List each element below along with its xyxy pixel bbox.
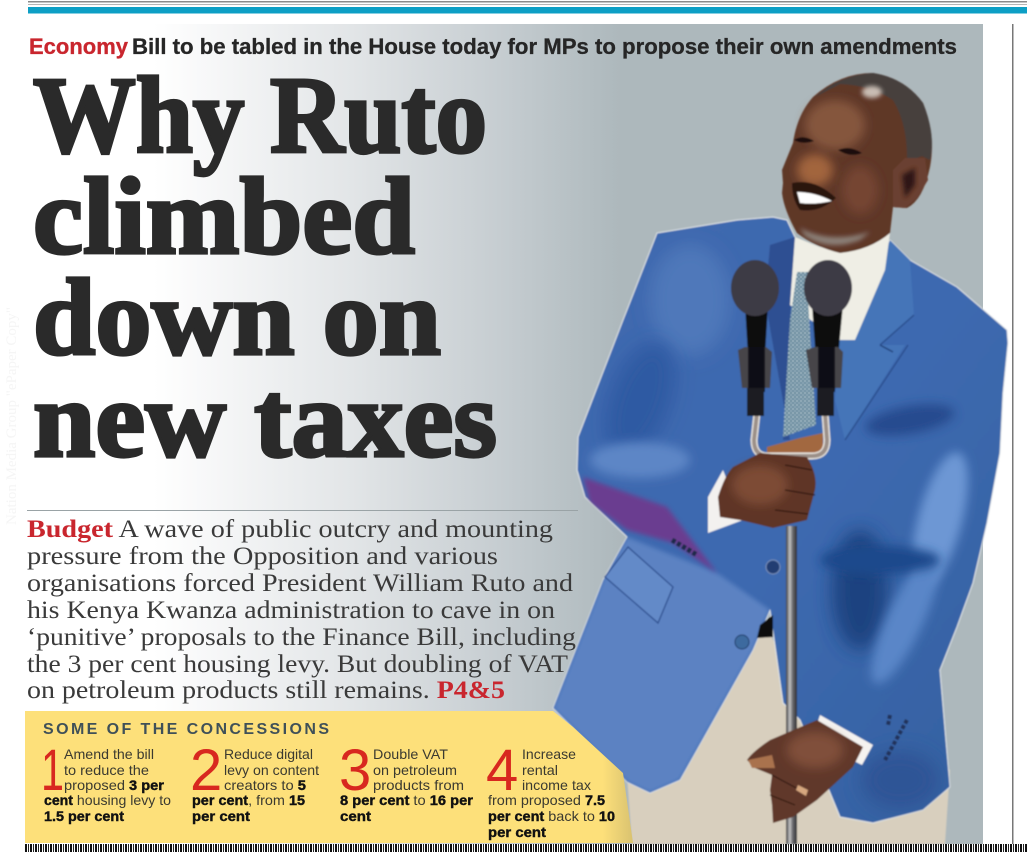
concession 1: Amend the bill — [64, 746, 154, 762]
subhead: Bill to be tabled in the House today for MPs to propose their own amendments — [132, 34, 957, 59]
concession 3 — [339, 738, 474, 824]
lower hand — [747, 720, 863, 823]
microphone right — [804, 260, 852, 416]
concession 2: Reduce digital — [224, 746, 313, 762]
summary paragraph — [27, 516, 577, 704]
microphone left — [731, 260, 779, 416]
right column rule — [1012, 24, 1014, 844]
concession 4: per cent back to 10 — [488, 808, 615, 824]
top rules — [28, 1, 1027, 14]
concession 4: per cent — [488, 824, 546, 840]
concession 1: to reduce the — [64, 762, 149, 778]
microphone stand — [786, 526, 797, 844]
mouth — [792, 182, 836, 210]
head — [782, 73, 932, 253]
shirt collar — [790, 233, 890, 340]
summary paragraph: on petroleum products still remains. P4&5 — [27, 677, 505, 704]
headline: Why Ruto — [33, 55, 487, 176]
concession 2: levy on content — [224, 762, 319, 778]
concession 4: income tax — [522, 777, 591, 793]
concession 3: Double VAT — [373, 746, 448, 762]
headline: new taxes — [33, 359, 497, 480]
eyes — [794, 137, 814, 143]
concession 2: creators to 5 — [224, 777, 306, 793]
concession 3: products from — [373, 777, 464, 793]
concession 2: per cent — [192, 808, 250, 824]
tie — [783, 272, 816, 437]
upper cuff — [708, 470, 743, 533]
upper hand — [718, 453, 816, 528]
suit body — [553, 217, 1008, 823]
headline: down on — [33, 257, 441, 378]
concession 4 — [486, 738, 615, 840]
subhead: Economy — [29, 34, 129, 59]
summary paragraph: the 3 per cent housing levy. But doubling of VAT — [27, 651, 568, 678]
trousers — [627, 625, 950, 844]
concessions heading: SOME OF THE CONCESSIONS — [43, 721, 329, 738]
summary paragraph: pressure from the Opposition and various — [27, 543, 498, 570]
concession 3: 3 — [339, 738, 371, 803]
concession 1: cent housing levy to — [44, 792, 171, 808]
summary rule — [27, 510, 578, 511]
ear — [893, 158, 928, 208]
photo: man in blue suit at microphones — [553, 73, 1008, 844]
concession 3: on petroleum — [373, 762, 457, 778]
concession 3: 8 per cent to 16 per — [340, 792, 474, 808]
concession 1: 1.5 per cent — [44, 808, 124, 824]
summary paragraph: Budget A wave of public outcry and mounting — [27, 516, 554, 543]
concession 1: proposed 3 per — [64, 777, 165, 793]
concession 2 — [190, 738, 319, 824]
concession 2: 2 — [190, 738, 222, 803]
lower cuff — [812, 715, 873, 765]
right sleeve buttons — [885, 715, 907, 760]
belt — [757, 615, 773, 638]
barcode rule — [25, 844, 1027, 852]
concession 4: from proposed 7.5 — [488, 792, 605, 808]
summary paragraph: organisations forced President William Ruto and — [27, 570, 574, 597]
concession 4: rental — [522, 762, 558, 778]
concession 4: 4 — [486, 738, 518, 803]
suit shading — [553, 237, 979, 810]
summary paragraph: ‘punitive’ proposals to the Finance Bill, including — [27, 624, 577, 651]
concession 4: Increase — [522, 746, 576, 762]
headline: climbed — [33, 156, 415, 277]
stubble — [800, 228, 870, 245]
finger over holder — [767, 433, 823, 456]
concession 1 — [41, 738, 171, 824]
panel: concessions — [25, 711, 633, 843]
watermark: Nation Media Group "ePaper Copy" — [4, 307, 20, 525]
sleeve buttons — [672, 540, 697, 555]
concession 3: cent — [340, 808, 371, 824]
concession 1: 1 — [41, 738, 64, 803]
microphone holder — [754, 413, 827, 456]
hair — [815, 73, 932, 162]
headline — [33, 55, 497, 480]
concession 2: per cent, from 15 — [192, 792, 305, 808]
pocket flap — [605, 547, 673, 623]
jacket buttons — [766, 560, 780, 574]
summary paragraph: his Kenya Kwanza administration to cave in on — [27, 597, 556, 624]
